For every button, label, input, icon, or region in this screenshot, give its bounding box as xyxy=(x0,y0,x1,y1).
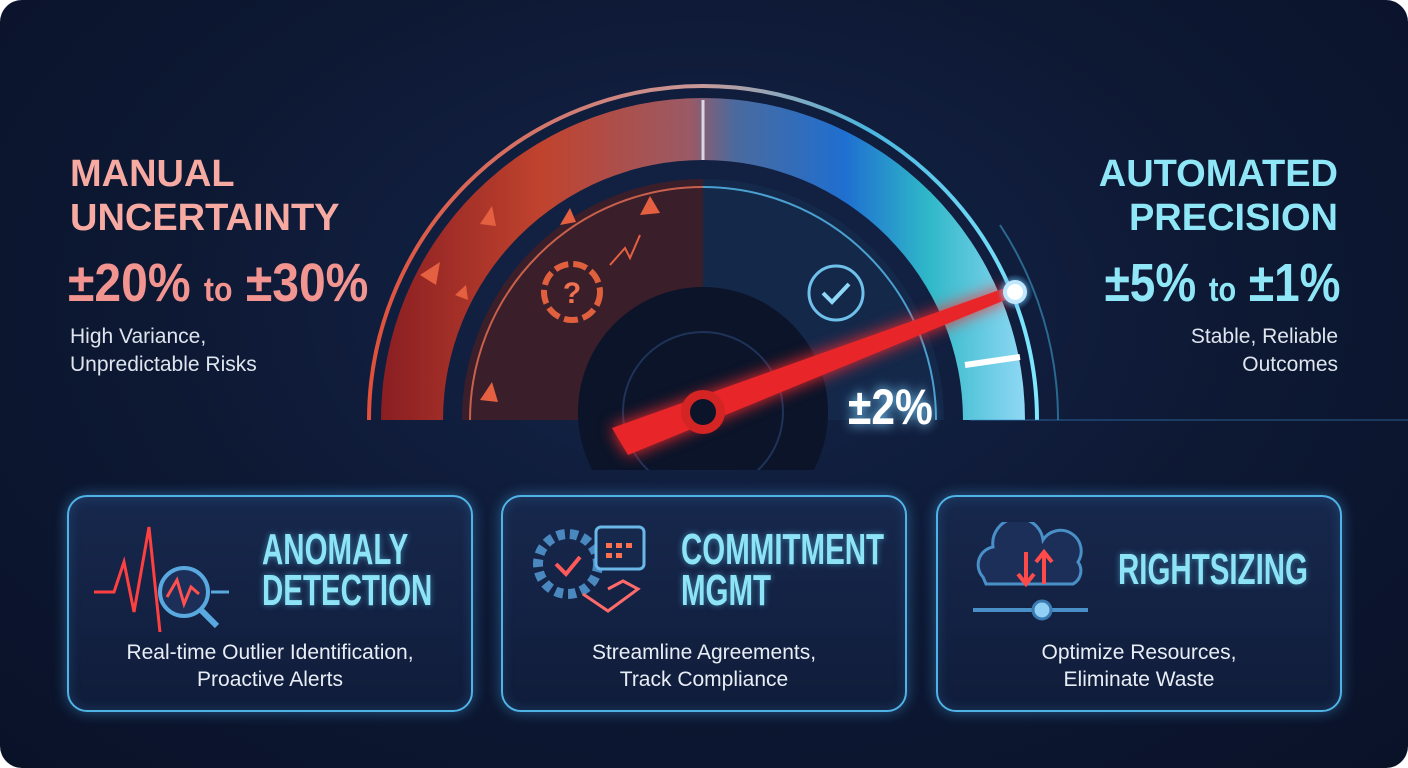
left title: UNCERTAINTY xyxy=(70,197,340,239)
outer ring xyxy=(369,86,1058,420)
right title: PRECISION xyxy=(1129,197,1338,239)
label ±2%: ±2% xyxy=(848,379,933,435)
debris xyxy=(420,196,660,402)
icon: gear calendar handshake xyxy=(533,526,646,613)
right desc: Stable, Reliable xyxy=(1191,325,1338,348)
title: ANOMALY xyxy=(262,525,408,574)
desc xyxy=(1042,641,1236,691)
desc: Proactive Alerts xyxy=(197,668,343,691)
icon: check xyxy=(809,266,863,320)
desc: Optimize Resources, xyxy=(1042,641,1236,664)
title xyxy=(260,525,434,615)
right desc xyxy=(1191,325,1338,376)
left title: MANUAL xyxy=(70,153,235,195)
left desc: High Variance, xyxy=(70,325,206,348)
right title: AUTOMATED xyxy=(1099,153,1338,195)
card: rightsizing xyxy=(936,495,1342,712)
desc: Real-time Outlier Identification, xyxy=(126,641,414,664)
icon: cloud slider xyxy=(973,522,1088,620)
left title xyxy=(70,153,340,239)
inner sector xyxy=(462,179,944,420)
right desc: Outcomes xyxy=(1242,353,1338,376)
hub xyxy=(578,287,828,470)
desc: Track Compliance xyxy=(620,668,788,691)
left desc: Unpredictable Risks xyxy=(70,353,257,376)
left range: ±20% to ±30% xyxy=(68,253,368,313)
needle xyxy=(612,274,1033,455)
right title xyxy=(1099,153,1338,239)
desc: Eliminate Waste xyxy=(1064,668,1214,691)
title: MGMT xyxy=(681,566,771,615)
desc: Streamline Agreements, xyxy=(592,641,816,664)
desc xyxy=(592,641,816,691)
icon: question xyxy=(544,264,600,320)
title xyxy=(678,525,886,615)
desc xyxy=(126,641,414,691)
title: DETECTION xyxy=(262,566,432,615)
card: anomaly detection xyxy=(67,495,473,712)
title: COMMITMENT xyxy=(681,525,884,574)
icon: question: ? xyxy=(563,277,581,310)
card: commitment mgmt xyxy=(501,495,907,712)
colored band xyxy=(381,98,1025,420)
right range: ±5% to ±1% xyxy=(1104,253,1340,313)
title: RIGHTSIZING xyxy=(1118,545,1308,594)
gauge xyxy=(367,84,1408,470)
left desc xyxy=(70,325,257,376)
icon: pulse magnifier xyxy=(94,526,229,632)
